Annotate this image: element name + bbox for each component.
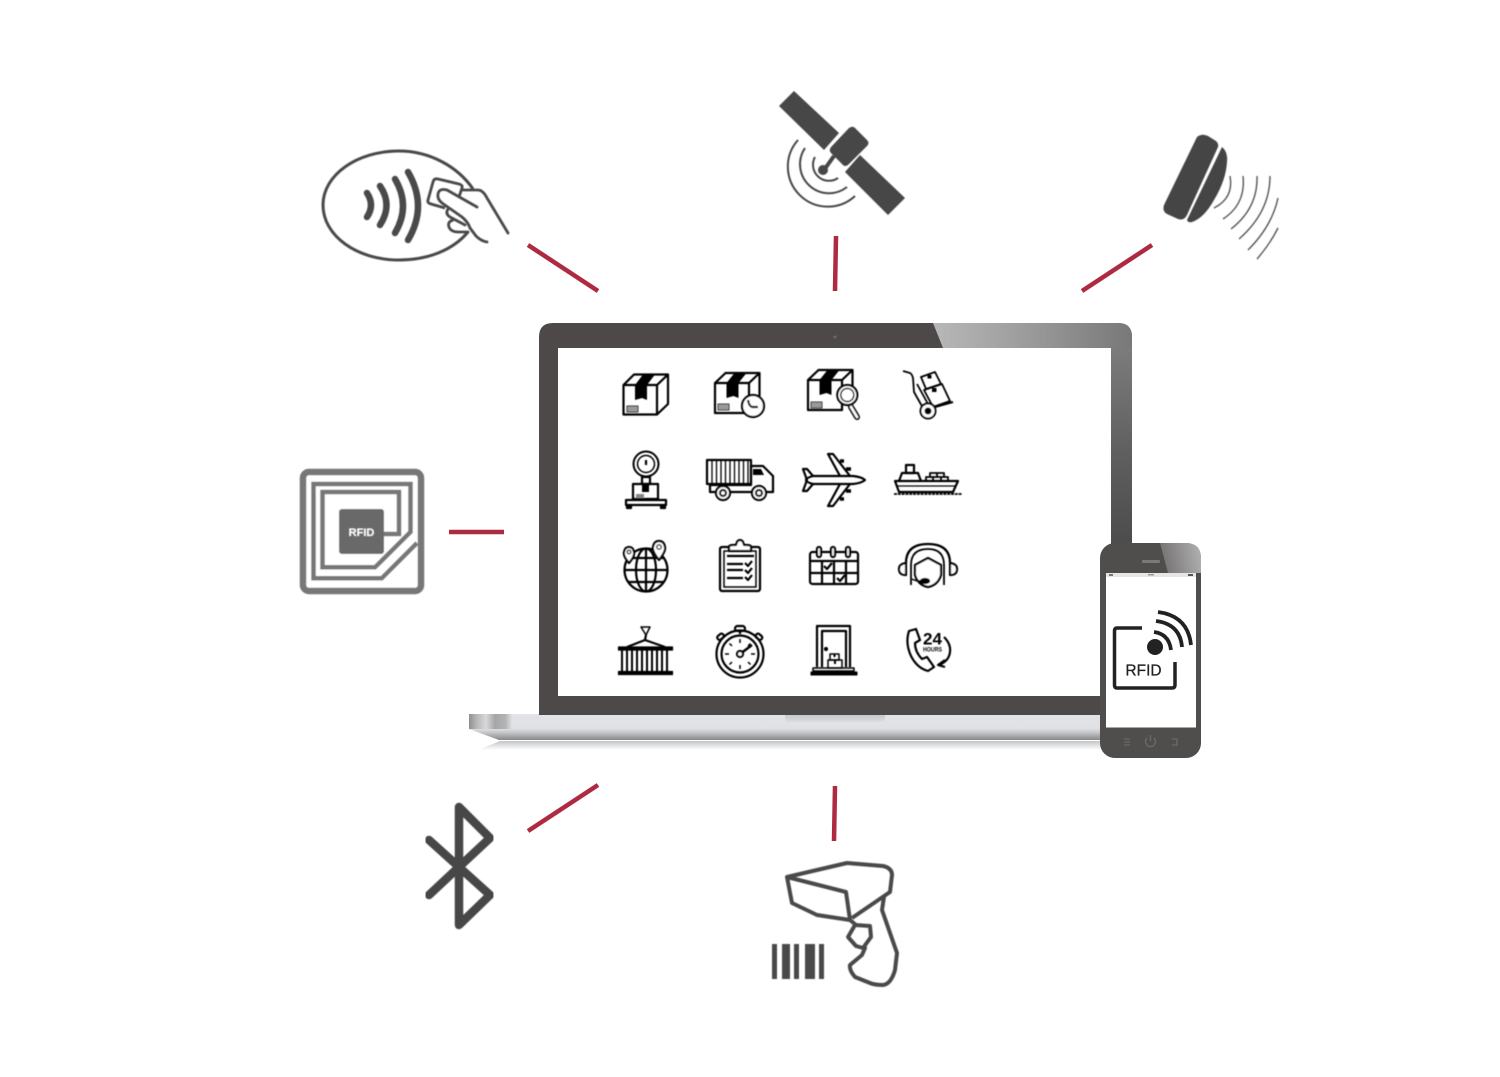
laptop lid bbox=[539, 323, 1132, 715]
icon: RFID tag bbox=[303, 472, 421, 591]
icon: stopwatch bbox=[716, 626, 764, 678]
connector lines bbox=[449, 236, 1152, 841]
icon: satellite bbox=[779, 91, 905, 215]
icon: weighing scale bbox=[626, 452, 666, 508]
laptop bbox=[469, 323, 1132, 750]
icon: container on crane bbox=[618, 627, 672, 674]
smartphone bbox=[1100, 543, 1201, 758]
icon: cargo ship bbox=[894, 465, 962, 494]
laptop base bbox=[469, 714, 1102, 750]
icon: 24 hours phone: 24 bbox=[923, 630, 943, 648]
icon: contactless payment bbox=[323, 151, 508, 260]
icon: globe with pins bbox=[624, 541, 668, 592]
icon: hand truck bbox=[903, 371, 953, 418]
logistics icon grid bbox=[618, 370, 962, 678]
icon: wireless transmitter bbox=[1163, 135, 1278, 259]
icon: calendar bbox=[810, 547, 858, 584]
icon: barcode scanner bbox=[772, 863, 897, 985]
icon: parcel bbox=[624, 374, 668, 414]
icon: clipboard checklist bbox=[720, 540, 760, 591]
icon: 24 hours phone bbox=[907, 629, 950, 671]
icon: support agent bbox=[899, 544, 957, 587]
icon: RFID tag: RFID bbox=[349, 527, 374, 539]
phone RFID symbol bbox=[1114, 612, 1191, 688]
phone RFID symbol: RFID bbox=[1125, 662, 1162, 680]
icon: door with parcel bbox=[811, 626, 857, 675]
icon: delivery truck bbox=[707, 460, 773, 500]
icon: bluetooth bbox=[429, 807, 490, 925]
icon: airplane bbox=[803, 454, 865, 506]
icon: 24 hours phone: HOURS bbox=[923, 648, 942, 654]
icon: parcel with magnifier bbox=[808, 370, 857, 417]
icon: parcel with clock bbox=[715, 373, 764, 417]
